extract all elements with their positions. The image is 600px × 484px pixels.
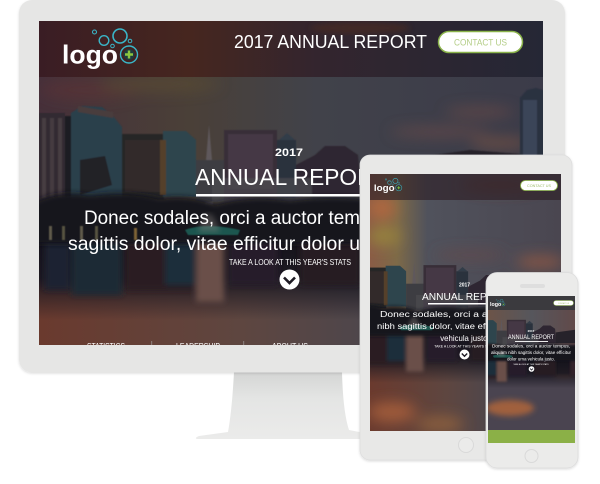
- phone hero text: aliquam nibh sagittis dolor, vitae efficitur: [491, 350, 572, 355]
- tablet: [358, 154, 574, 462]
- sky photo: [39, 77, 543, 208]
- phone sky: [488, 310, 575, 348]
- phone body: [486, 272, 578, 468]
- phone contact button: CONTACT US: [558, 302, 570, 305]
- hero text: TAKE A LOOK AT THIS YEAR'S STATS: [229, 257, 351, 267]
- navigation: STATISTICS: [87, 341, 125, 351]
- phone water: [488, 373, 575, 430]
- tablet body: [360, 155, 572, 460]
- phone logo: logo: [490, 302, 501, 308]
- tablet hero text: TAKE A LOOK AT THIS YEAR'S STATS: [434, 344, 496, 348]
- phone screen: [488, 296, 575, 443]
- phone home button: [525, 450, 538, 462]
- phone hero text: Donec sodales, orci a auctor tempus,: [492, 344, 570, 348]
- monitor stand: [196, 372, 382, 439]
- header bar: [39, 21, 543, 77]
- hero text: 2017: [275, 147, 303, 159]
- hero text: ANNUAL REPORT: [195, 164, 387, 190]
- logo: [62, 29, 138, 70]
- tablet water: [370, 356, 486, 431]
- tablet home button: [458, 438, 474, 452]
- tablet hero text: ANNUAL REPORT: [422, 291, 509, 303]
- contact button: CONTACT US: [454, 38, 507, 48]
- hero text: [68, 148, 360, 265]
- water reflection: [39, 273, 360, 345]
- tablet hero text: nibh sagittis dolor, vitae efficitur dolor urna: [377, 322, 554, 331]
- tablet skyline: [370, 265, 512, 380]
- tablet sky: [370, 174, 561, 314]
- tablet hero text: vehicula justo.: [440, 334, 490, 343]
- monitor bezel: [19, 0, 565, 372]
- phone: [484, 272, 580, 470]
- tablet header bar: [370, 174, 561, 200]
- skyline: [39, 88, 543, 316]
- tablet contact button: [520, 180, 558, 190]
- phone scroll button: [529, 366, 534, 372]
- tablet hero text: 2017: [459, 282, 470, 288]
- phone hero text: dolor urna vehicula justo.: [507, 356, 555, 362]
- navigation: LEADERSHIP: [176, 341, 220, 351]
- contact button: [438, 32, 522, 52]
- hero text: Donec sodales, orci a auctor tem: [84, 208, 360, 229]
- phone green footer: [488, 430, 575, 443]
- phone skyline: [488, 320, 575, 386]
- tablet screen: [370, 174, 561, 431]
- tablet hero text: [378, 282, 486, 348]
- phone hero text: TAKE A LOOK AT THIS YEAR'S STATS: [513, 363, 549, 366]
- tablet hero text: Donec sodales, orci a auctor tempus,: [380, 310, 550, 319]
- tablet logo: logo: [374, 183, 395, 194]
- tablet logo: [374, 178, 402, 194]
- tablet contact button: CONTACT US: [527, 183, 551, 188]
- scroll down button: [280, 270, 300, 290]
- logo: logo: [62, 40, 118, 70]
- phone hero text: ANNUAL REPORT: [508, 334, 554, 341]
- phone hero text: [491, 329, 572, 366]
- header title: 2017 ANNUAL REPORT: [234, 32, 427, 52]
- phone logo: [490, 299, 505, 308]
- navigation: [88, 341, 308, 345]
- tablet scroll button: [460, 350, 470, 360]
- phone speaker: [520, 284, 545, 288]
- monitor screen: [39, 21, 543, 345]
- phone contact button: [554, 300, 574, 306]
- navigation: ABOUT US: [272, 341, 308, 351]
- phone hero text: 2017: [528, 329, 535, 333]
- hero text: sagittis dolor, vitae efficitur dolor u: [68, 234, 360, 255]
